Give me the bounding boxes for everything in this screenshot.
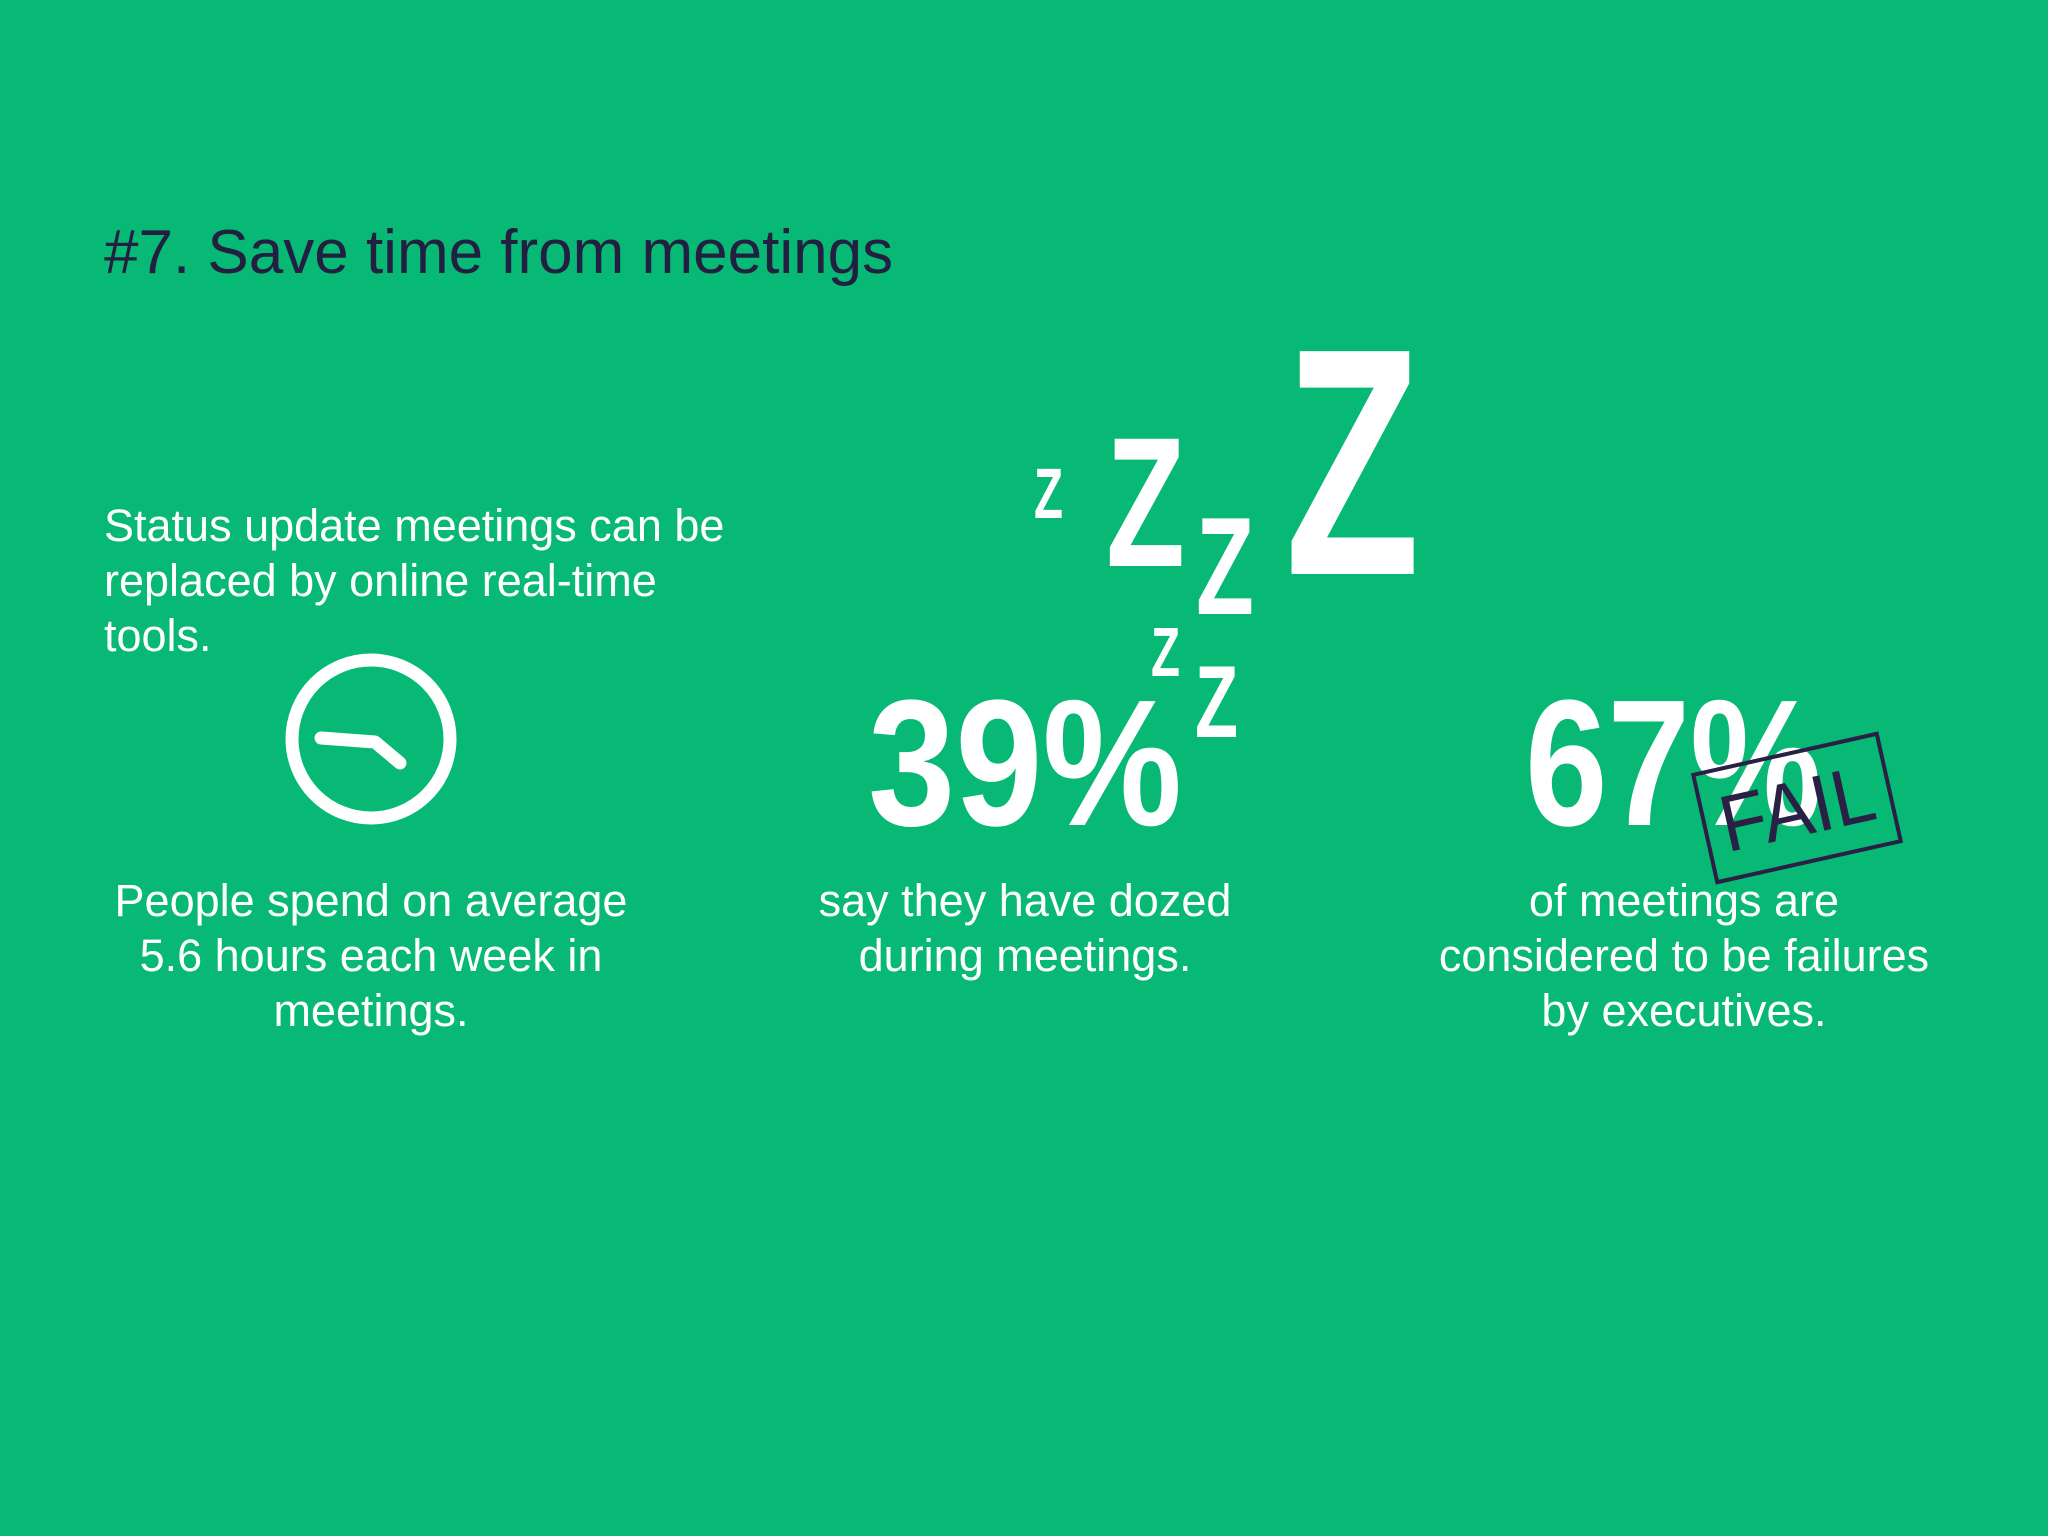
- icon: zzz: Z: [1151, 613, 1180, 691]
- stat: 67%: 67%: [1525, 663, 1822, 864]
- caption: hours in meetings: meetings.: [273, 985, 469, 1036]
- intro text: tools.: [104, 610, 212, 661]
- caption: failures: considered to be failures: [1439, 930, 1929, 981]
- intro text: Status update meetings can be: [104, 500, 724, 551]
- caption: dozed: during meetings.: [859, 930, 1191, 981]
- caption: failures: [1439, 875, 1929, 1036]
- caption: dozed: say they have dozed: [819, 875, 1231, 926]
- icon: zzz: Z: [1285, 281, 1420, 643]
- caption: failures: of meetings are: [1529, 875, 1839, 926]
- icon: zzz: Z: [1034, 455, 1063, 534]
- caption: hours in meetings: [115, 875, 627, 1036]
- icon: zzz: [1034, 281, 1420, 759]
- caption: dozed: [819, 875, 1231, 981]
- icon: zzz: Z: [1196, 489, 1254, 644]
- stamp: FAIL: FAIL: [1711, 748, 1883, 869]
- caption: hours in meetings: 5.6 hours each week in: [140, 930, 602, 981]
- intro text: [104, 500, 724, 661]
- title: #7. Save time from meetings: [104, 218, 893, 287]
- icon: zzz: Z: [1106, 400, 1185, 606]
- icon: zzz: Z: [1195, 645, 1238, 759]
- stat: 39%: 39%: [868, 663, 1182, 864]
- caption: hours in meetings: People spend on average: [115, 875, 627, 926]
- icon: clock: [286, 654, 456, 824]
- intro text: replaced by online real-time: [104, 555, 657, 606]
- caption: failures: by executives.: [1541, 985, 1827, 1036]
